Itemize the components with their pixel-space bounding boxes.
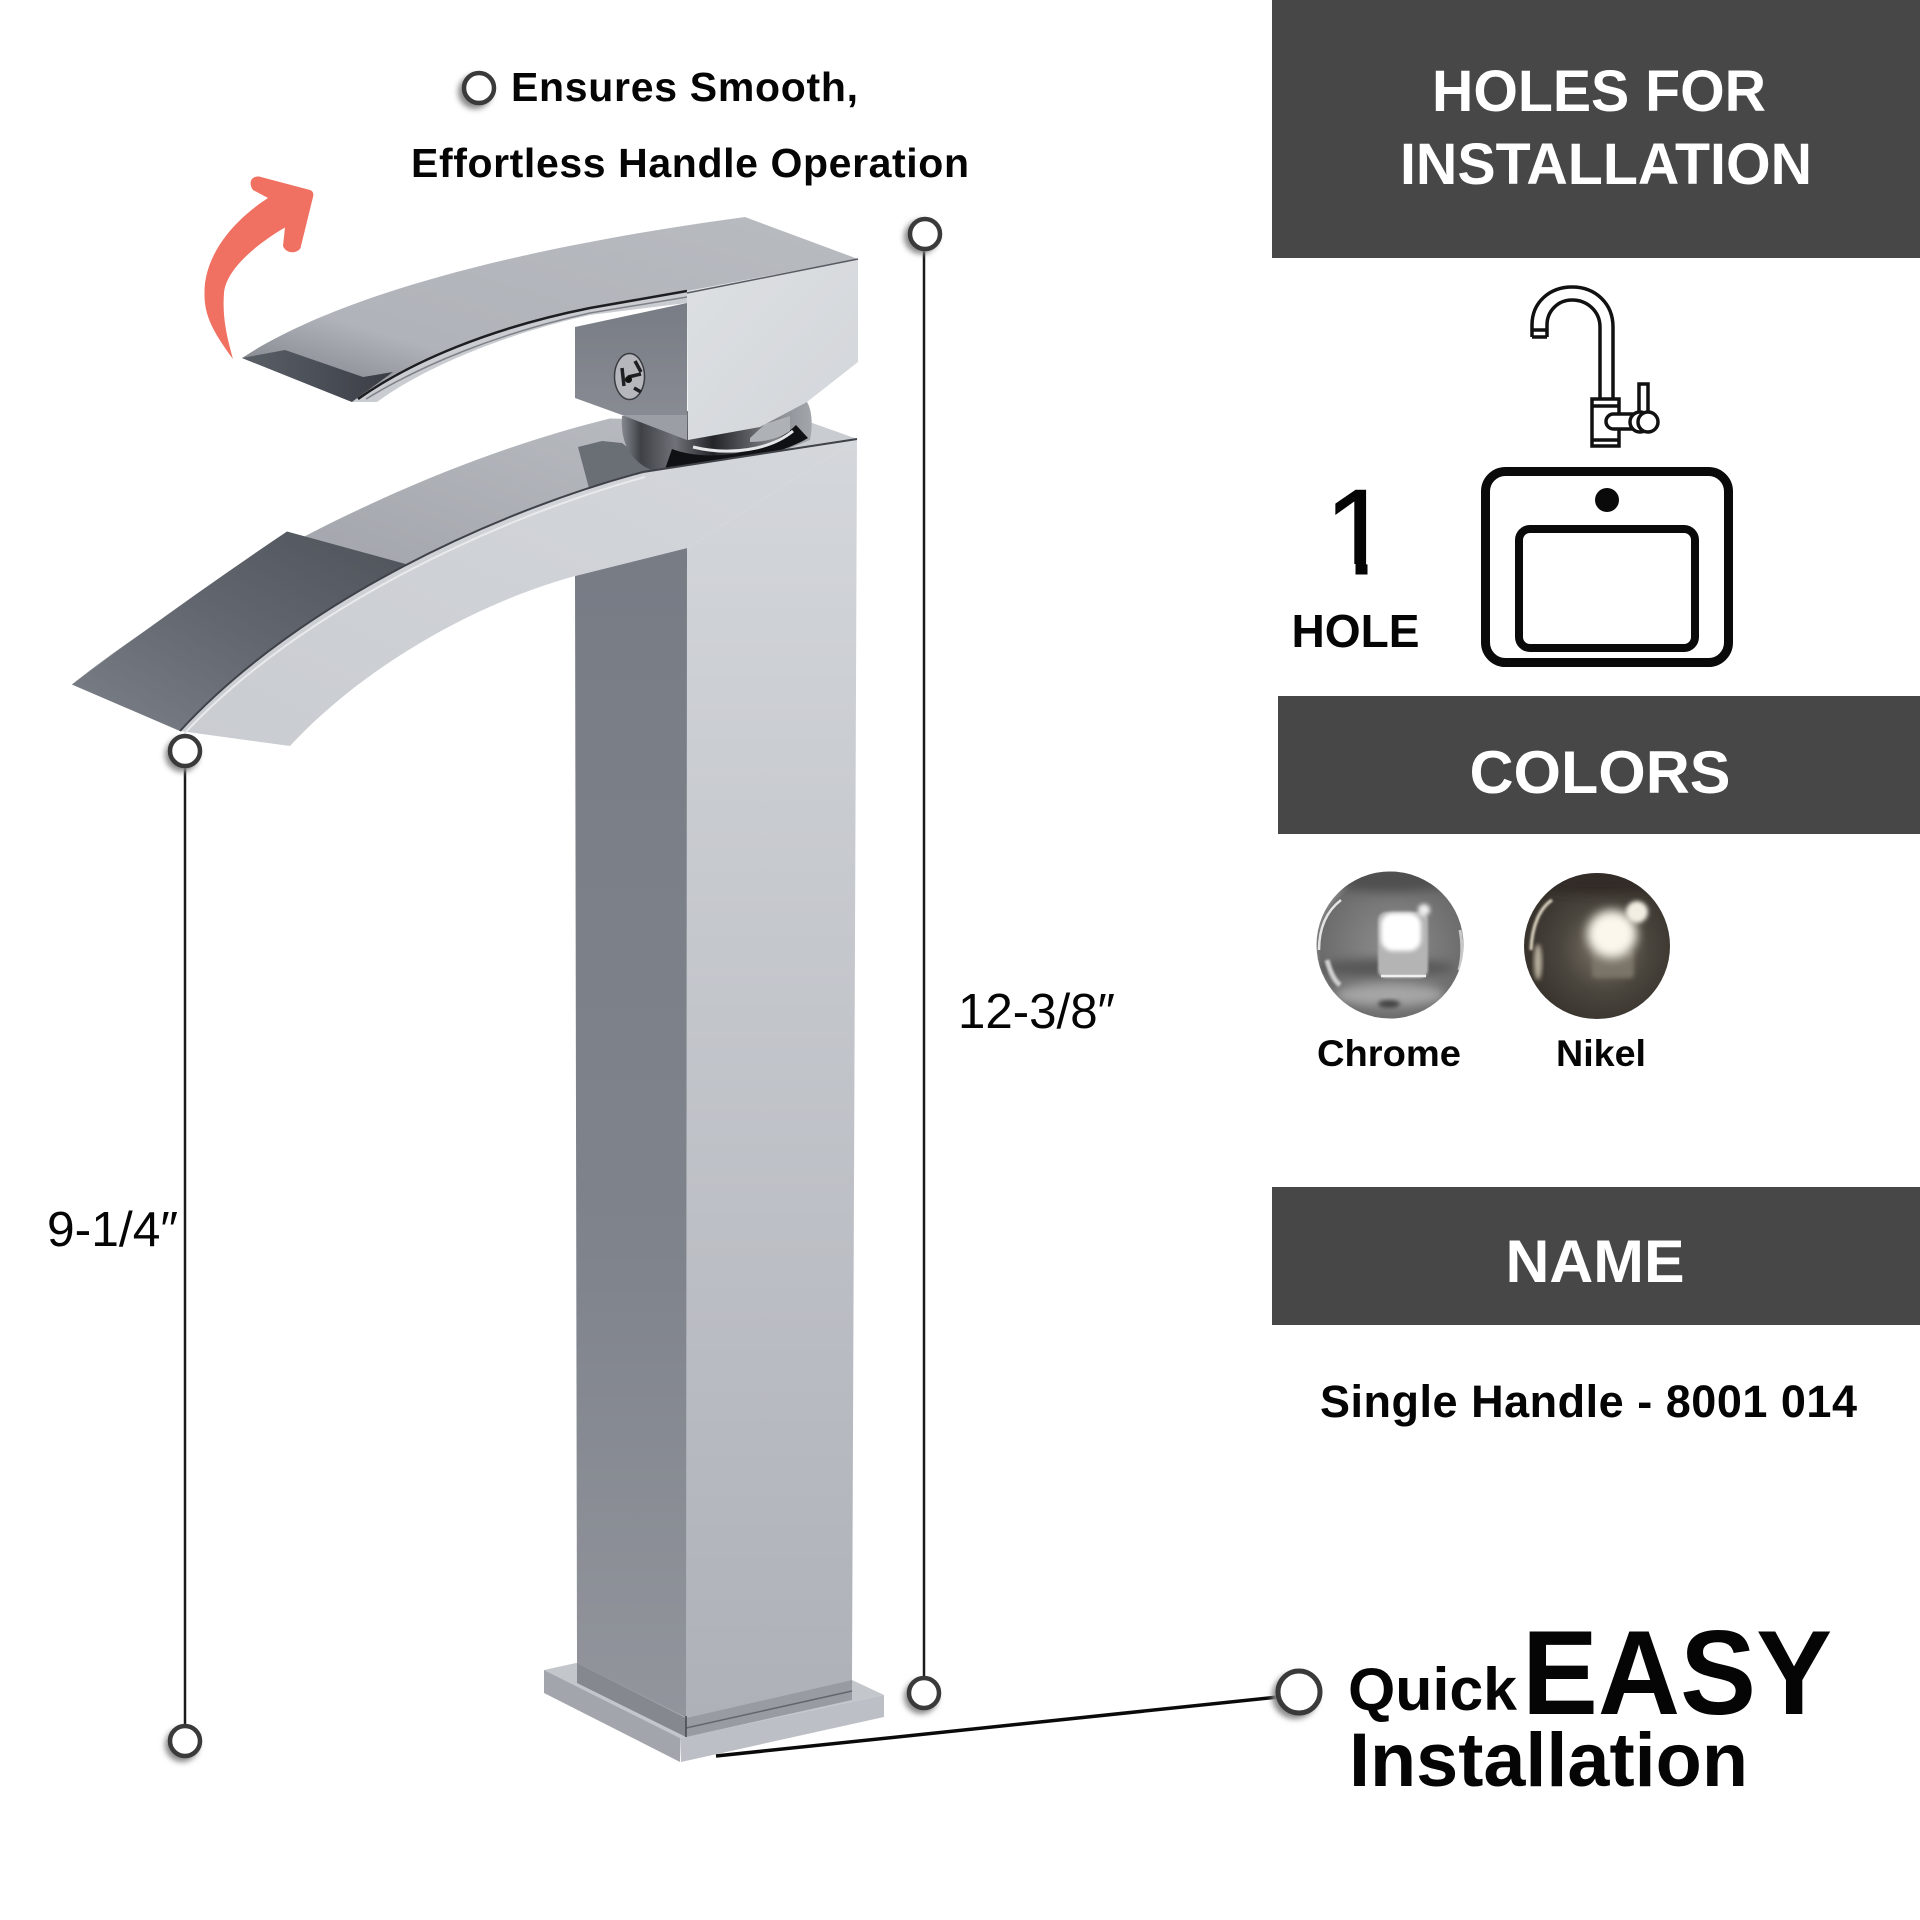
panel header: holes for installation: HOLES FOR [1432, 59, 1766, 124]
faucet base plate [544, 1663, 884, 1762]
icon: gooseneck faucet [1532, 287, 1658, 446]
color swatch: nikel [1524, 870, 1670, 1019]
faucet handle [242, 217, 858, 440]
text: quick easy installation: Quick [1348, 1655, 1517, 1723]
faucet column [575, 439, 857, 1737]
panel header: colors: COLORS [1470, 738, 1730, 806]
product name text: Single Handle - 8001 014 [1320, 1376, 1857, 1427]
text: quick easy installation [1348, 1606, 1832, 1803]
color swatch: chrome [1315, 864, 1464, 1018]
dimension: spout height 9-1/4: 9-1/4″ [47, 1203, 178, 1257]
panel header: holes for installation [1272, 0, 1920, 258]
callout marker: handle note [458, 73, 494, 109]
panel header: name: NAME [1506, 1227, 1684, 1295]
color label: chrome: Chrome [1317, 1032, 1461, 1074]
feature note: handle operation: Effortless Handle Operation [411, 140, 969, 186]
arrow: handle lift direction [204, 176, 313, 359]
callout line: base to easy installation [716, 1671, 1320, 1756]
hole count label: 1 [1324, 464, 1392, 600]
icon: sink with one hole [1486, 472, 1728, 662]
text: quick easy installation: EASY [1522, 1606, 1832, 1740]
color label: nikel: Nikel [1556, 1032, 1646, 1074]
hole count label [1294, 490, 1418, 648]
panel header: name [1272, 1187, 1920, 1325]
hole count label: HOLE [1292, 605, 1420, 657]
dimension: overall height 12-3/8 [904, 219, 1115, 1714]
faucet screw [614, 354, 644, 400]
faucet spout top surface [72, 418, 857, 731]
dimension: spout height 9-1/4 [47, 736, 200, 1762]
feature note: handle operation [411, 64, 969, 186]
dimension: overall height 12-3/8: 12-3/8″ [958, 985, 1115, 1039]
faucet cartridge [622, 402, 812, 473]
faucet spout front [180, 439, 857, 746]
feature note: handle operation: Ensures Smooth, [511, 64, 858, 110]
panel header: colors [1278, 696, 1920, 834]
faucet illustration [72, 217, 884, 1762]
text: quick easy installation: Installation [1349, 1718, 1748, 1803]
panel header: holes for installation: INSTALLATION [1400, 132, 1812, 197]
